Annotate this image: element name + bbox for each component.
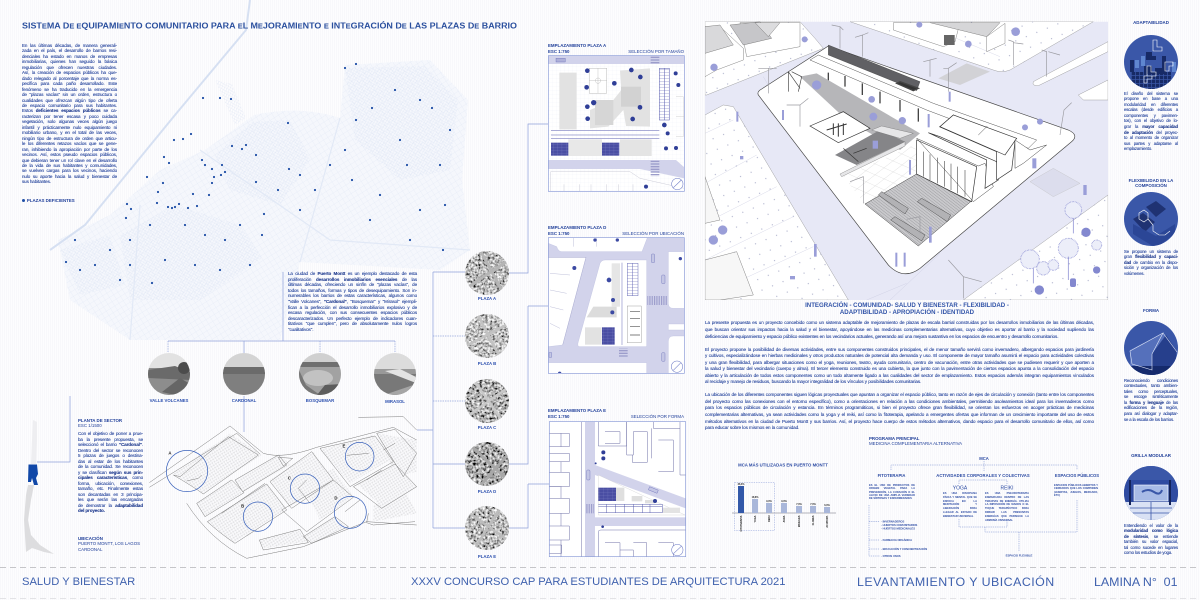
city description text: últimas décadas, ofreciendo un sinfín de "plazas vacías", de <box>288 282 417 287</box>
site plan plaza D <box>548 238 684 375</box>
chart: MCA most used in Puerto Montt: MCA MÁS UTILIZADAS EN PUERTO MONTT <box>738 462 828 468</box>
chart: MCA most used in Puerto Montt <box>732 462 836 531</box>
form heading: FORMA <box>1143 308 1159 313</box>
adaptability text: componentes y pavimen- <box>1124 113 1178 118</box>
site photo Mirasol <box>374 353 416 404</box>
city description text: "cualitativos". <box>288 327 313 332</box>
project paragraph 3: del proyecto como las conexiones con el entorno específico), como a orientaciones en relación a las condiciones ambientales, permitiendo asoleamientos ideal para los invernaderos como <box>705 399 1094 404</box>
sector plan text: tamaño, etc. Finalmente estas <box>78 486 143 491</box>
project paragraph 2: abierto y la articulación de todos estos componentes como un todo altamente ligado a las cualidades del sector de emplazamiento. Estos espacios además integran equipamientos vinculados <box>705 373 1094 378</box>
footer: sheet number: LAMINA N° 01 <box>1094 575 1177 589</box>
modular grid text: también su valor espacial, <box>1124 539 1178 544</box>
city description text: numerables los barrios de estas características, algunos como <box>288 293 417 298</box>
plaza A plan heading: SELECCIÓN POR TAMAÑO <box>628 49 684 54</box>
plaza A plan heading: ESC 1:750 <box>548 49 569 54</box>
site plan plaza E <box>549 422 686 557</box>
MCA program diagram: - FARMACIA ORGÁNICA <box>881 537 912 542</box>
adaptability text: sus partes y adaptarse al <box>1124 141 1178 146</box>
adaptability text <box>1124 90 1178 151</box>
flexibility heading: COMPOSICIÓN <box>1135 183 1167 188</box>
adaptability text: tos), con el objetivo de lo- <box>1124 118 1178 123</box>
plaza E plan heading: SELECCIÓN POR FORMA <box>631 414 684 419</box>
project paragraph 3: para los espacios públicos de circulación y estancia. En términos programáticos, si bien el proyecto ofrece gran flexibilidad, se orientan los esfuerzos en acoger prácticas de medicinas <box>705 405 1094 410</box>
form text: Reconociendo condiciones <box>1124 378 1178 382</box>
MCA program diagram: YOGA <box>953 486 968 492</box>
chart: MCA most used in Puerto Montt: YOGA <box>754 515 757 523</box>
flexibility heading: FLEXIBILIDAD EN LA <box>1129 178 1173 183</box>
intro text block: fenómeno se ha traducido en la emergencia <box>22 87 117 92</box>
site photo Valle Volcanes: VALLE VOLCANES <box>150 398 189 403</box>
MCA program diagram: - HUERTOS COMUNITARIOS <box>881 523 918 527</box>
plaza D plan heading: EMPLAZAMIENTO PLAZA D <box>548 225 606 230</box>
project paragraph 1: deficiencias de equipamiento y espacio público existentes en los vecindarios actuales, generando así una mejora sustantiva en los espacios de encuentro y desarrollo comunitarios. <box>705 334 1058 339</box>
chart: MCA most used in Puerto Montt: MASAJES <box>798 515 801 527</box>
intro text block: sus habitantes. <box>22 179 51 184</box>
chart: MCA most used in Puerto Montt: 7,0% <box>810 503 817 506</box>
project paragraph 2: El proyecto propone la posibilidad de diversas actividades, entre sus componentes construidos principales, el de menor tamaño servirá como invernadero, albergando espacios para jardinería <box>705 347 1094 352</box>
main program label: PROGRAMA PRINCIPAL <box>869 436 920 440</box>
project paragraph 3: para educar sobre los mismos en la comunidad. <box>705 425 799 430</box>
project paragraph 2: y una gran flexibilidad, para albergar situaciones como el yoga, reuniones, teatro, ayuda comunitaria, centro de vacunación, entre otras actividades que se pudiesen requerir y que aporten a <box>705 360 1094 365</box>
city description text <box>288 271 418 332</box>
plaza C aerial photo <box>465 379 510 430</box>
yoga description: ES UNA DISCIPLINA FÍSICA Y MENTAL QUE SE ENFOCA EN LA MEDITACIÓN Y LIBERACIÓN PARA LLEGAR AL ESTADO DE BIENESTAR UNIVERSAL <box>943 492 977 518</box>
adaptability text: modularidad en diferentes <box>1124 102 1178 107</box>
sector plan text: de demostrar la adaptabilidad <box>78 503 143 508</box>
MCA program diagram: - OTROS USOS <box>881 554 901 558</box>
form text: se a la escala de los barrios. <box>1124 417 1174 422</box>
sector plan text: son decantadas en 3 principa- <box>78 492 143 497</box>
city map with deficient plazas <box>50 0 470 340</box>
sector plan heading: PLANTA DE SECTOR <box>78 418 122 423</box>
site photo Cardonal: CARDONAL <box>232 398 257 403</box>
project paragraph 1 <box>705 320 1094 339</box>
footer dashed lines <box>0 568 1200 598</box>
chart: MCA most used in Puerto Montt: 7,0% <box>796 503 803 506</box>
modular grid text: de síntesis, se entiende <box>1124 534 1178 539</box>
footer: contest: XXXV CONCURSO CAP PARA ESTUDIANTES DE ARQUITECTURA 2021 <box>411 576 785 588</box>
project paragraph 3: La ubicación de los diferentes componentes siguen lógicas proyectuales que apuntan a organizar el espacio público, tanto en razón de ejes de circulación y conexión (tanto entre los componentes <box>705 392 1094 397</box>
sector plan with plaza circles: E <box>343 444 346 449</box>
sector plan text: les que serán las encargadas <box>78 497 143 502</box>
sidewalks <box>705 22 1108 300</box>
chart: MCA most used in Puerto Montt: 6,0% <box>824 504 831 507</box>
plaza D plan heading: ESC 1:750 <box>548 231 569 236</box>
intro text block: Así, la creación de espacios públicos ha que- <box>22 70 117 75</box>
sector plan heading <box>78 418 122 428</box>
intro text block: de espacio comunitario para sus habitantes. <box>22 103 117 108</box>
site photo Cardonal <box>223 353 265 403</box>
location label: PUERTO MONTT, LOS LAGOS <box>78 541 140 546</box>
project paragraph 3: métodos alternativos en la ciudad de Puerto Montt y sus barrios. Así, el proyecto hace cuerpo de estos métodos alternativos, dando espacio para el desarrollo comunitario de ellos, así como <box>705 419 1094 424</box>
sector plan text: das al estar de los habitantes <box>78 459 143 464</box>
greenhouse and hall <box>865 174 971 246</box>
crosswalks <box>1030 168 1080 197</box>
icon: adaptability circle <box>1124 35 1178 90</box>
connector lines <box>37 124 549 528</box>
modular grid text: tal como sucede en lugares <box>1124 545 1178 550</box>
plaza platform <box>758 46 1075 274</box>
modular grid text <box>1124 522 1178 555</box>
sector plan text: y se clasifican según sus prin- <box>78 470 143 475</box>
MCA program diagram: ACTIVIDADES CORPORALES Y COLECTIVAS <box>936 473 1030 478</box>
main program label <box>869 436 962 446</box>
intro text block: En las últimas décadas, de manera generali- <box>22 43 117 48</box>
plaza D aerial photo: PLAZA D <box>478 489 496 494</box>
project paragraph 3: complementarias alternativas, ya sean actividades como la yoga y el reiki, así como la fitoterapia, apelando a emergentes ofertas que informan de un crecimiento importante del uso de estos <box>705 412 1094 417</box>
chart: MCA most used in Puerto Montt: 9,0% <box>766 500 773 503</box>
form text: la forma y lenguaje de las <box>1124 400 1178 405</box>
adaptability heading: ADAPTABILIDAD <box>1133 20 1169 25</box>
sector plan text: 5 plazas de juegos o destina- <box>78 453 143 458</box>
wall and canopy <box>828 45 920 91</box>
city description text: descaracterizados. Un perfecto ejemplo de indicadores cuan- <box>288 316 417 321</box>
adaptability text: escalas (desde edificios a <box>1124 107 1178 112</box>
location label: CARDONAL <box>78 547 102 552</box>
form text: para así dialogar y adaptar- <box>1124 411 1178 416</box>
MCA program diagram: ESPACIOS PÚBLICOS <box>1055 473 1099 478</box>
form text: edificaciones de la región, <box>1124 405 1178 410</box>
sandbox <box>810 112 870 143</box>
location label: UBICACIÓN <box>78 536 103 541</box>
plaza D plan heading <box>548 225 684 236</box>
form text: contextuales, tanto ambien- <box>1124 383 1178 388</box>
main title: SISTEMA DE EQUIPAMIENTO COMUNITARIO PARA EL MEJORAMIENTO E INTEGRACIÓN D E LAS PLAZAS D E BARRIO <box>22 20 517 30</box>
project paragraph 1: que buscan orientar sus impactos hacia la salud y el bienestar, apoyándose en las medicinas complementarias alternativas, cuyo objetivo es aportar al barrio y la sociedad supliendo las <box>705 327 1094 332</box>
plaza B aerial photo: PLAZA B <box>478 361 496 366</box>
houses <box>705 22 1005 300</box>
phytotherapy description: ES EL USO DE PRODUCTOS DE ORIGEN VEGETAL PARA LA PREVENCIÓN, LA CURACIÓN O EL ALIVIO DE UNA AMPLIA VARIEDAD DE SÍNTOMAS Y ENFERMEDADES <box>869 484 915 500</box>
modular grid text: como los estudios de yoga. <box>1124 550 1172 555</box>
plaza location dots <box>65 63 451 284</box>
project paragraph 2: y cultivos, especializándose en hierbas medicinales y otros productos naturales de potencial alta demanda y uso. El componente de mayor tamaño asumirá el espacio para actividades colectivas <box>705 353 1094 358</box>
concept heading: ADAPTIBILIDAD - APROPIACIÓN - IDENTIDAD <box>840 309 974 316</box>
sector plan text: cipales características, como <box>78 475 143 480</box>
chart: MCA most used in Puerto Montt: FITOTERAPIA <box>740 515 743 531</box>
adaptability text: El diseño del sistema se <box>1124 90 1178 96</box>
sector plan with plaza circles: D <box>334 495 338 500</box>
sector plan text <box>78 431 143 513</box>
chart: MCA most used in Puerto Montt: FLORES <box>812 515 815 525</box>
legend: deficient plazas: PLAZAS DEFICIENTES <box>27 198 75 203</box>
plaza D aerial photo <box>465 442 512 494</box>
intro text block: pecífica para cada paño desarrollado. Este <box>22 81 117 86</box>
sector plan text: forma, ubicación, conexiones, <box>78 481 143 486</box>
plaza E plan heading: EMPLAZAMIENTO PLAZA E <box>548 408 606 413</box>
intro text block: regulación que ofrecen nuestras ciudades. <box>22 65 117 70</box>
city description text: La ciudad de Puerto Montt es un ejemplo destacado de esta <box>288 271 417 276</box>
swing <box>788 72 802 92</box>
flexibility text: volúmenes. <box>1124 271 1144 276</box>
plaza A plan heading <box>548 43 684 54</box>
adaptability text: de adaptación del proyec- <box>1124 130 1178 135</box>
intro text block: cualidades que ofrezcan algún tipo de oferta <box>22 98 117 103</box>
MCA program diagram: - HUERTOS MEDICINALES <box>881 526 915 530</box>
sector plan with plaza circles <box>149 417 417 558</box>
sector plan with plaza circles: B <box>241 503 244 508</box>
intro text block: racterizan por tener escasa y poco cuidada <box>22 114 117 119</box>
sector plan text: de la comunidad. Se reconocen <box>78 464 143 469</box>
sector plan with plaza circles: C <box>288 476 291 481</box>
intro text block: infantil y prácticamente nulo equipamiento ni <box>22 125 117 130</box>
project paragraph 2: la salud y bienestar del vecindario (cuerpo y alma). El tercer elemento construido es una cubierta, la que junto con la pavimentación de ciertos espacios apunta a la consolidación del espacio <box>705 366 1094 371</box>
trees and people <box>709 22 1087 279</box>
intro text block: de "plazas vacías" sin un orden, estructura o <box>22 92 117 97</box>
site plan plaza A <box>548 56 684 191</box>
flexibility text: dad de cambio en la dispo- <box>1124 260 1178 265</box>
location label <box>78 536 140 552</box>
flexibility text: sición y organización de los <box>1124 265 1178 270</box>
city description text: titativos "que cumplen", pero de absolutamente nulos logros <box>288 321 417 326</box>
plaza C aerial photo: PLAZA C <box>478 425 496 430</box>
modular grid text: modularidad como lógica <box>1124 528 1178 533</box>
city description text: proliferación desarrollos inmobiliarios esenciales de las <box>288 277 417 282</box>
city description text: escasa regulación, con sus consecuentes espacios públicos <box>288 310 417 315</box>
chart: MCA most used in Puerto Montt: AURA <box>783 515 786 522</box>
sector plan heading: ESC 1/1500 <box>78 423 102 428</box>
map of Chile <box>24 420 54 554</box>
intro text block: ningún tipo de estructura de orden que articu- <box>22 136 117 141</box>
MCA program diagram: REIKI <box>1000 486 1014 492</box>
intro text block: dado relegado al porcentaje que la norma es- <box>22 76 117 81</box>
plaza A aerial photo: PLAZA A <box>478 296 496 301</box>
adaptability text: grar la mayor capacidad <box>1124 124 1178 129</box>
city description text: fican a la perfección el desarrollo inmobiliarios explosivo y de <box>288 305 417 310</box>
intro text block: le los diferentes retazos vacíos que se gene- <box>22 141 117 146</box>
site photo Bosquemar: BOSQUEMAR <box>306 398 335 403</box>
sector plan text: Con el objetivo de poner a prue- <box>78 431 143 436</box>
axonometric view of the project <box>705 22 1108 300</box>
site photo Mirasol: MIRASOL <box>385 399 405 404</box>
sector plan with plaza circles: A <box>168 451 172 456</box>
concept heading <box>805 301 1009 316</box>
adaptability text: to al momento de organizar <box>1124 135 1178 140</box>
modular grid heading: GRILLA MODULAR <box>1131 453 1171 458</box>
plaza D plan heading: SELECCIÓN POR UBICACIÓN <box>622 231 684 236</box>
plaza E aerial photo <box>465 506 510 559</box>
adaptability text: propone en base a una <box>1124 96 1178 101</box>
MCA program diagram: ESPACIO FLEXIBLE <box>1006 554 1032 558</box>
public spaces description: ESPACIOS PÚBLICOS ABIERTOS Y CERRADOS QUE LOS COMPONEN (HUERTAS, JUEGOS, MERCADO, ETC) <box>1054 484 1098 497</box>
sector plan text: ba la presente propuesta, se <box>78 437 143 442</box>
form text: se escoge sintéticamente <box>1124 394 1178 399</box>
flexibility text: gran flexibilidad y capaci- <box>1124 254 1178 259</box>
footer: theme: SALUD Y BIENESTAR <box>22 576 135 588</box>
site photo Bosquemar <box>299 353 341 403</box>
intro text block: inmobiliarias, quienes han seguido la básica <box>22 59 117 64</box>
tree cluster lower right <box>1021 202 1102 275</box>
flexibility text <box>1124 248 1178 276</box>
flexibility text: Se propone un sistema de <box>1124 248 1178 254</box>
intro text block <box>22 43 118 184</box>
MCA program diagram: - INVERNADEROS <box>881 520 905 524</box>
dark paving and benches <box>835 130 905 165</box>
intro text block: ran, inhibiendo la apropiación por parte de los <box>22 147 117 152</box>
intro text block: que debieran tener un rol clave en el desarrollo <box>22 158 117 163</box>
intro text block: Estos deficientes espacios públicos se ca- <box>22 108 117 113</box>
site photo Valle Volcanes <box>148 353 190 403</box>
project paragraph 3 <box>705 392 1094 430</box>
flexibility heading <box>1128 178 1174 188</box>
reiki description: ES UNA PSEUDOTERAPIA ENMARCADA DENTRO DE LAS TERAPIAS DE ENERGÍA. UTILIZA LA IMPOSICIÓN DE MANOS O EL TOQUE TERAPÉUTICO PARA DIRIGIR LAS PRESUNTAS ENERGÍAS QUE PERSIGUE LA ARMONÍA UNIVERSAL <box>985 492 1029 522</box>
icon: form house circle <box>1124 321 1178 376</box>
chart: MCA most used in Puerto Montt: 36,4% <box>738 483 745 486</box>
street lamps <box>758 25 1072 298</box>
sector plan text: del proyecto. <box>78 508 105 513</box>
intro text block: zada en el país, el desarrollo de barrios resi- <box>22 48 117 53</box>
chart: MCA most used in Puerto Montt: 18,6% <box>752 496 759 499</box>
benches in paving <box>878 192 951 241</box>
intro text block: vegetación, solo algunas veces algún juego <box>22 119 117 124</box>
sector plan text: Dentro del sector se reconocen <box>78 448 143 453</box>
MCA program diagram <box>869 456 1099 558</box>
intro text block: mobiliario urbano, y en el total de las veces, <box>22 130 117 135</box>
MCA program diagram: FITOTERAPIA <box>878 473 905 478</box>
form text <box>1124 378 1178 422</box>
plaza E plan heading: ESC 1:750 <box>548 414 569 419</box>
main program label: MEDICINA COMPLEMENTARIA ALTERNATIVA <box>869 441 962 446</box>
form text: tales como perceptuales, <box>1124 389 1178 394</box>
icon: modular grid circle <box>1124 466 1178 520</box>
footer: sheet section: LEVANTAMIENTO Y UBICACIÓN <box>857 575 1055 589</box>
project paragraph 2 <box>705 347 1094 384</box>
project paragraph 1: La presente propuesta es un proyecto concebido como un sistema adaptable de mejoramiento de plazas de escala barrial construidas por los desarrollos inmobiliarios de las últimas décadas, <box>705 320 1094 325</box>
plaza A plan heading: EMPLAZAMIENTO PLAZA A <box>548 43 606 48</box>
MCA program diagram: - EDUCACIÓN Y CONCIENTIZACIÓN <box>881 546 927 551</box>
city description text: todos los tamaños, formas y tipos de desequipamiento. Son in- <box>288 288 417 293</box>
concept heading: INTEGRACIÓN - COMUNIDAD- SALUD Y BIENESTAR - FLEXIBILIDAD - <box>805 302 1009 309</box>
project paragraph 2: al reciclaje y manejo de residuos, buscando la mayor integralidad de los vínculos y posibilidades comunitarias. <box>705 379 921 384</box>
modular grid text: Entendiendo el valor de la <box>1124 522 1178 528</box>
sector plan text: seleccionó el barrio "Cardonal". <box>78 442 143 447</box>
city description text: "Valle Volcanes", "Cardonal", "Bosquemar" y "Mirasol" ejempli- <box>288 299 417 304</box>
intro text block: se vuelven cargas para los vecinos, haciendo <box>22 168 117 173</box>
plaza B aerial photo <box>465 314 509 365</box>
chart: MCA most used in Puerto Montt: ACUPUNT. <box>826 515 829 528</box>
intro text block: nulo su aporte hacia la salud y bienestar de <box>22 174 117 179</box>
chart: MCA most used in Puerto Montt: 9,0% <box>781 500 788 503</box>
adaptability text: emplazamiento. <box>1124 146 1152 151</box>
plaza E plan heading <box>548 408 684 419</box>
plaza E aerial photo: PLAZA E <box>478 554 496 559</box>
MCA program diagram: MCA <box>979 456 989 461</box>
chart: MCA most used in Puerto Montt: REIKI <box>768 515 771 522</box>
plaza A aerial photo <box>465 251 509 300</box>
icon: flexibility circle <box>1124 192 1178 248</box>
intro text block: vecinos. Así, estos pseudo espacios públicos, <box>22 152 117 157</box>
intro text block: denciales ha estado en manos de empresas <box>22 54 117 59</box>
intro text block: de la vida de sus habitantes y comunidades, <box>22 163 117 168</box>
